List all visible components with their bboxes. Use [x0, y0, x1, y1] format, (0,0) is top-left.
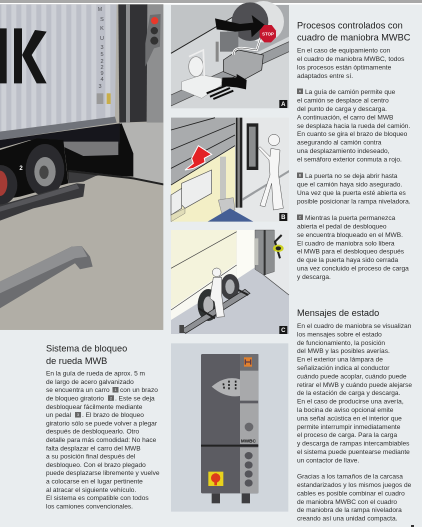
photo labels: container lettering: 9: [100, 71, 104, 77]
text block: mensajes: En el exterior una lámpara de: [297, 357, 383, 364]
text block: mensajes: del MWB y las posibles averías.: [297, 348, 390, 355]
text block: procesos: el cuadro de maniobra MWBC, todos: [297, 56, 405, 63]
text block: mensajes: creando así una unidad compacta.: [297, 516, 398, 523]
text block: procesos: Una vez que la puerta esté abierta es: [297, 190, 407, 197]
text block: mensajes: los mensajes sobre el estado: [297, 331, 382, 338]
text block: procesos: En cuanto se gira el brazo de bloqueo: [297, 131, 408, 138]
text block: sistema de bloqueo: [46, 371, 160, 510]
text block: mensajes: y descarga de rampas intercambiables: [297, 441, 410, 448]
text block: procesos: abierta el pedal de desbloqueo: [297, 223, 387, 230]
photo labels: container lettering: S: [100, 17, 104, 23]
text block: sistema de bloqueo: desbloquear fácilmente mediante: [46, 404, 143, 411]
heading: Sistema de bloqueo: [46, 344, 127, 366]
heading: Procesos controlados: Procesos controlados con: [297, 20, 403, 30]
text block: mensajes: el sistema puede puentearse mediante: [297, 449, 410, 456]
text block: sistema de bloqueo: . Este se deja: [115, 396, 155, 402]
text block: procesos: La puerta no se deja abrir hasta: [305, 173, 398, 180]
text block: procesos: La guía de camión permite que: [305, 89, 396, 96]
text block: mensajes: permite interrumpir inmediatamente: [297, 424, 401, 431]
text block: sistema de bloqueo: de largo de acero galvanizado: [46, 379, 134, 386]
text block: procesos: [297, 47, 411, 281]
text block: mensajes: cables es posible combinar el cuadro: [297, 490, 405, 497]
photo labels: container lettering: [98, 7, 104, 90]
text block: sistema de bloqueo: detalle para más comodidad: No hace: [46, 437, 157, 444]
text block: procesos: C: [299, 216, 302, 220]
heading: Procesos controlados: cuadro de maniobra MWBC: [297, 32, 411, 42]
text block: mensajes: señalización indica al conductor: [297, 365, 390, 372]
text block: procesos: asegurando al camión contra: [297, 140, 382, 147]
photo: truck at loading dock with wheel guide rails: [0, 4, 163, 330]
text block: sistema de bloqueo: se encuentra un carro: [46, 387, 110, 394]
text block: sistema de bloqueo: un pedal: [46, 412, 72, 419]
text block: sistema de bloqueo: falta desplazar el carro del MWB: [46, 445, 141, 452]
text block: mensajes: retirar el MWB y cuándo puede alejarse: [297, 382, 412, 389]
text block: sistema de bloqueo: 2: [110, 396, 112, 400]
photo labels: container lettering: 4: [100, 77, 104, 83]
text block: procesos: se desplaza hacia la rueda del camión.: [297, 123, 410, 130]
text block: sistema de bloqueo: de bloqueo giratorio: [46, 396, 104, 402]
text block: mensajes: [297, 323, 412, 523]
text block: mensajes: de la estación de carga y descarga.: [297, 390, 401, 397]
text block: sistema de bloqueo: . El brazo de bloqueo: [82, 412, 144, 419]
device label: MWBC: [241, 438, 256, 443]
badge letter B: B: [281, 215, 286, 221]
text block: procesos: de que la puerta haya sido cerrada: [297, 257, 399, 264]
text block: procesos: del punto de carga y descarga.: [297, 106, 387, 113]
text block: mensajes: el proceso de carga. Para la carga: [297, 432, 397, 439]
panel C: operator at guide rail illustration: [171, 230, 289, 334]
text block: procesos: adaptados entre sí.: [297, 73, 353, 80]
heading: Sistema de bloqueo: de rueda MWB: [46, 356, 107, 366]
heading: Mensajes de estado: Mensajes de estado: [297, 308, 379, 318]
photo labels: container lettering: M: [98, 7, 102, 13]
text block: mensajes: un contactor de llave.: [297, 457, 359, 464]
text block: procesos: una vez concluido el proceso de carga: [297, 266, 409, 273]
panel B: door and operator illustration: [171, 118, 289, 222]
photo labels: container lettering: 2: [100, 65, 104, 71]
text block: mensajes: de funcionamiento, la posición: [297, 340, 385, 347]
text block: sistema de bloqueo: El sistema es compatible con todos: [46, 495, 149, 502]
text block: procesos: los procesos están óptimamente: [297, 64, 392, 72]
text block: procesos: El cuadro de maniobra solo libera: [297, 240, 395, 247]
photo marker: 2: 2: [19, 166, 23, 172]
text block: procesos: posible posicionar la rampa niveladora.: [297, 198, 411, 205]
text block: sistema de bloqueo: los camiones convencionales.: [46, 503, 133, 510]
photo labels: container lettering: U: [100, 36, 104, 42]
badge letter C: C: [281, 328, 286, 334]
text block: mensajes: En el cuadro de maniobra se visualizan: [297, 323, 412, 330]
panel: MWBC control unit: [171, 343, 288, 512]
photo labels: container lettering: 3: [100, 45, 104, 51]
text block: sistema de bloqueo: a colocarse en el lugar pertinente: [46, 478, 143, 486]
badge letter A: A: [281, 102, 286, 108]
text block: sistema de bloqueo: después de desbloquearlo. Otro: [46, 429, 140, 436]
text block: sistema de bloqueo: giratorio sólo se puede volver a plegar: [46, 420, 158, 427]
panel A: wheel lock illustration: [171, 1, 289, 108]
photo labels: container lettering: 2: [100, 59, 104, 65]
text block: procesos: el semáforo exterior conmuta a rojo.: [297, 157, 402, 164]
text block: sistema de bloqueo: con un brazo: [120, 387, 158, 394]
text block: procesos: A: [299, 90, 302, 94]
text block: mensajes: una señal acústica en el interior que: [297, 415, 402, 422]
text block: procesos: que el camión haya sido asegurado.: [297, 181, 402, 188]
text block: sistema de bloqueo: 3: [77, 413, 79, 417]
text block: sistema de bloqueo: En la guía de rueda de aprox. 5 m: [46, 371, 146, 378]
photo labels: container lettering: 3: [98, 84, 102, 90]
text block: sistema de bloqueo: puede desplazarse libremente y vuelve: [46, 470, 160, 477]
text block: sistema de bloqueo: 1: [114, 388, 116, 392]
text block: mensajes: estandarizados y los mismos juegos de: [297, 482, 412, 489]
text block: procesos: el MWB para el desbloqueo después: [297, 249, 405, 256]
heading: Procesos controlados: [297, 20, 411, 42]
text block: sistema de bloqueo: al atracar el siguiente vehículo.: [46, 487, 136, 494]
heading: Sistema de bloqueo: Sistema de bloqueo: [46, 344, 127, 354]
text block: procesos: el camión se desplace al centro: [297, 97, 389, 104]
photo labels: container lettering: 5: [100, 52, 104, 58]
text block: sistema de bloqueo: a su posición final después del: [46, 454, 136, 461]
text block: procesos: y descarga.: [297, 274, 331, 281]
panel A: wheel lock illustration: STOP: [262, 31, 274, 36]
text block: procesos: se encuentra bloqueado en el MWB.: [297, 232, 403, 239]
text block: mensajes: de maniobra MWBC con el cuadro: [297, 499, 397, 506]
text block: procesos: A continuación, el carro del MWB: [297, 114, 394, 121]
text block: sistema de bloqueo: desbloqueo. Con el brazo plegado: [46, 462, 146, 469]
photo labels: container lettering: K: [100, 26, 104, 32]
text block: mensajes: En el caso de producirse una avería,: [297, 399, 404, 406]
text block: procesos: una desplazamiento indeseado,: [297, 148, 390, 155]
text block: mensajes: Gracias a los tamaños de la carcasa: [297, 474, 403, 481]
text block: procesos: Mientras la puerta permanezca: [305, 215, 396, 222]
text block: procesos: En el caso de equipamiento con: [297, 47, 391, 54]
text block: mensajes: de maniobra de la rampa niveladora: [297, 507, 402, 514]
text block: mensajes: la bocina de aviso opcional emite: [297, 407, 394, 414]
text block: procesos: B: [299, 174, 302, 178]
text block: mensajes: cuándo puede acoplar, cuándo puede: [297, 373, 407, 380]
